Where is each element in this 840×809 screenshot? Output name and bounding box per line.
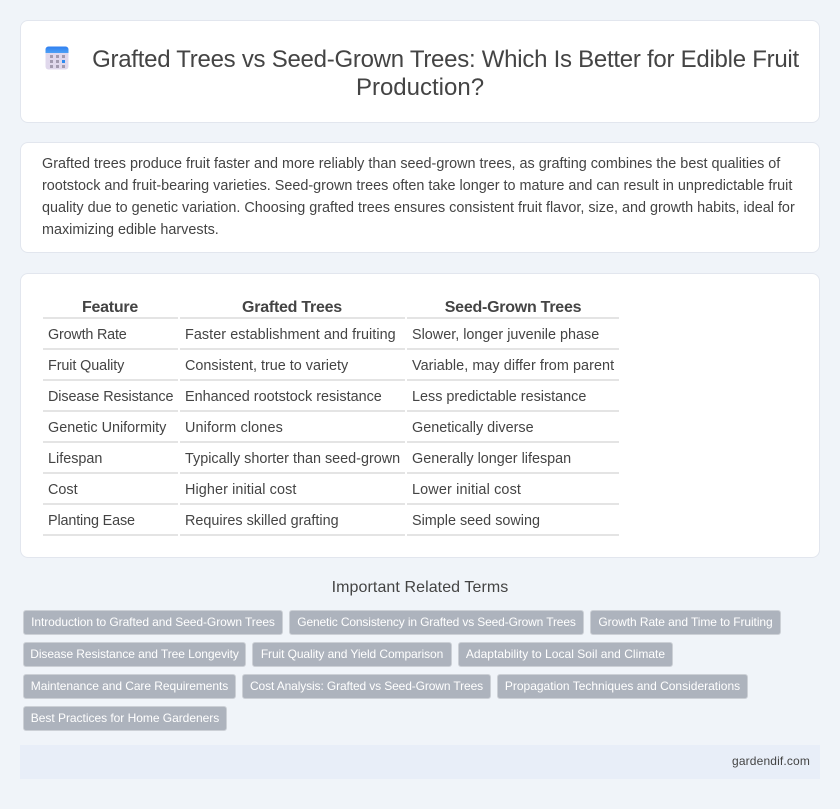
intro text: rootstock and fruit-bearing varieties. Seed-grown trees often take longer to mature and can result in unpredictable fruit bbox=[42, 178, 792, 194]
related term tags: Introduction to Grafted and Seed-Grown Trees bbox=[31, 615, 275, 629]
related term tags bbox=[23, 610, 781, 731]
intro text: quality due to genetic variation. Choosing grafted trees ensures consistent fruit flavor, size, and growth habits, ideal for bbox=[42, 200, 795, 216]
icon: calendar bbox=[46, 46, 68, 70]
comparison table: Lifespan bbox=[48, 451, 102, 467]
comparison table: Seed-Grown Trees bbox=[445, 299, 581, 316]
related term tags: Propagation Techniques and Considerations bbox=[505, 679, 740, 693]
title bbox=[92, 46, 799, 101]
related term tags: Maintenance and Care Requirements bbox=[31, 679, 228, 693]
comparison table: Lower initial cost bbox=[412, 482, 521, 498]
comparison table: Higher initial cost bbox=[185, 482, 296, 498]
heading: related terms: Important Related Terms bbox=[332, 579, 508, 596]
comparison table: Growth Rate bbox=[48, 327, 127, 343]
comparison table: Variable, may differ from parent bbox=[412, 358, 614, 374]
comparison table: Typically shorter than seed-grown bbox=[185, 451, 400, 467]
comparison table: Planting Ease bbox=[48, 513, 135, 529]
related term tags: Fruit Quality and Yield Comparison bbox=[261, 647, 443, 661]
comparison table: Feature bbox=[82, 299, 138, 316]
comparison table: Cost bbox=[48, 482, 78, 498]
comparison table: Simple seed sowing bbox=[412, 513, 540, 529]
related term tags: Growth Rate and Time to Fruiting bbox=[598, 615, 773, 629]
table card bbox=[20, 273, 820, 558]
comparison table: Less predictable resistance bbox=[412, 389, 586, 405]
title: Grafted Trees vs Seed-Grown Trees: Which Is Better for Edible Fruit bbox=[92, 46, 799, 73]
comparison table: Fruit Quality bbox=[48, 358, 124, 374]
header card bbox=[20, 20, 820, 123]
intro text: maximizing edible harvests. bbox=[42, 222, 219, 238]
comparison table bbox=[43, 299, 619, 536]
intro text bbox=[42, 156, 795, 238]
comparison table: Uniform clones bbox=[185, 420, 283, 436]
comparison table: Slower, longer juvenile phase bbox=[412, 327, 599, 343]
comparison table: Genetically diverse bbox=[412, 420, 534, 436]
comparison table: Enhanced rootstock resistance bbox=[185, 389, 382, 405]
related term tags: Adaptability to Local Soil and Climate bbox=[466, 647, 665, 661]
related term tags: Cost Analysis: Grafted vs Seed-Grown Trees bbox=[250, 679, 483, 693]
title: Production? bbox=[356, 74, 484, 101]
comparison table: Generally longer lifespan bbox=[412, 451, 571, 467]
related term tags: Best Practices for Home Gardeners bbox=[31, 711, 219, 725]
related term tags: Genetic Consistency in Grafted vs Seed-Grown Trees bbox=[297, 615, 576, 629]
footer: gardendif.com bbox=[732, 754, 810, 768]
comparison table: Disease Resistance bbox=[48, 389, 173, 405]
intro text: Grafted trees produce fruit faster and more reliably than seed-grown trees, as grafting combines the best qualities of bbox=[42, 156, 780, 172]
comparison table: Genetic Uniformity bbox=[48, 420, 166, 436]
footer bbox=[20, 745, 820, 779]
comparison table: Faster establishment and fruiting bbox=[185, 327, 396, 343]
comparison table: Requires skilled grafting bbox=[185, 513, 339, 529]
comparison table: Consistent, true to variety bbox=[185, 358, 348, 374]
related term tags: Disease Resistance and Tree Longevity bbox=[30, 647, 239, 661]
comparison table: Grafted Trees bbox=[242, 299, 342, 316]
intro card bbox=[20, 142, 820, 253]
